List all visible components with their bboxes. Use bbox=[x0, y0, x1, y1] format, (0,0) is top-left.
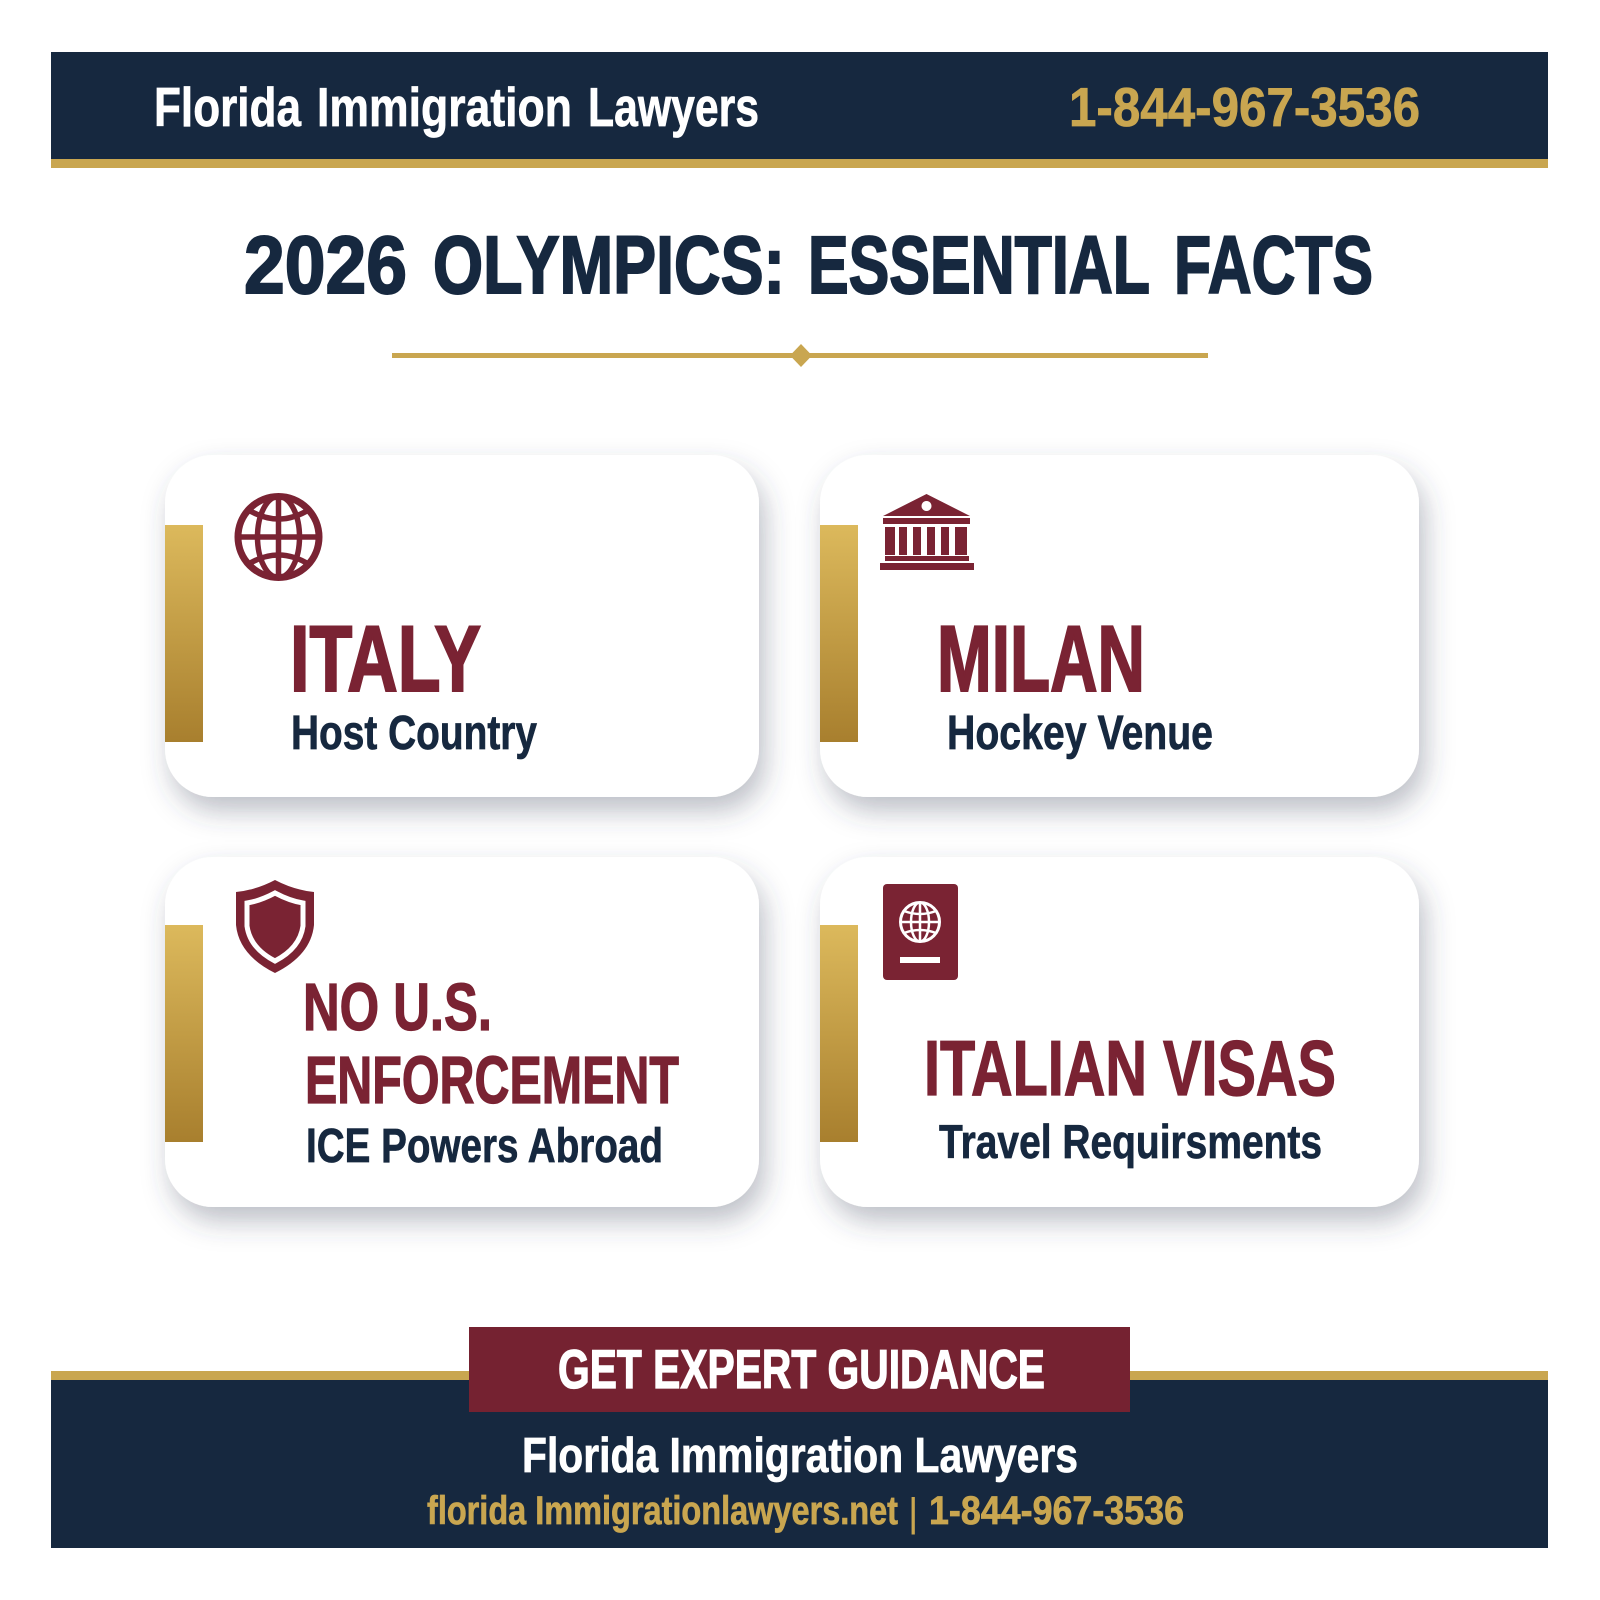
header firm name: Immigration bbox=[317, 76, 572, 138]
icon: shield bbox=[236, 880, 314, 973]
title: OLYMPICS: bbox=[433, 220, 785, 311]
label: hockey venue: Hockey Venue bbox=[947, 707, 1213, 760]
footer contact line: florida Immigrationlawyers.net bbox=[427, 1489, 898, 1533]
heading: No U.S.: NO U.S. bbox=[303, 970, 492, 1045]
heading: Italian visas: ITALIAN VISAS bbox=[924, 1024, 1336, 1112]
gold accent bar bbox=[165, 925, 203, 1142]
footer band bbox=[51, 1327, 1548, 1548]
icon: globe bbox=[238, 496, 319, 578]
call-to-action box: GET EXPERT GUIDANCE bbox=[558, 1338, 1045, 1400]
heading: Italy: ITALY bbox=[290, 606, 481, 711]
panel: No U.S. enforcement bbox=[165, 857, 759, 1207]
footer firm name: Florida Immigration Lawyers bbox=[522, 1429, 1078, 1483]
header firm name: Lawyers bbox=[588, 76, 759, 138]
gold accent bar bbox=[820, 525, 858, 742]
gold accent bar bbox=[820, 925, 858, 1142]
footer contact line: | bbox=[908, 1491, 918, 1535]
label: travel requirements: Travel Requirsments bbox=[939, 1115, 1322, 1168]
panel: Milan bbox=[820, 455, 1419, 797]
heading: Milan: MILAN bbox=[937, 606, 1145, 711]
label: host country: Host Country bbox=[291, 707, 537, 760]
panel: Italian visas bbox=[820, 857, 1419, 1207]
footer contact line: 1-844-967-3536 bbox=[929, 1489, 1184, 1533]
panel: Italy bbox=[165, 455, 759, 797]
title bbox=[244, 220, 1373, 311]
header band bbox=[51, 52, 1548, 168]
header firm name bbox=[154, 76, 759, 138]
title divider with diamond bbox=[392, 344, 1208, 367]
header phone: 1-844-967-3536 bbox=[1069, 76, 1420, 138]
gold accent bar bbox=[165, 525, 203, 742]
title: FACTS bbox=[1174, 220, 1373, 311]
label: ICE powers abroad: ICE Powers Abroad bbox=[306, 1120, 663, 1173]
title: 2026 bbox=[244, 220, 407, 311]
icon: classical building bbox=[880, 494, 974, 570]
heading: Enforcement: ENFORCEMENT bbox=[305, 1043, 679, 1118]
header firm name: Florida bbox=[154, 76, 301, 138]
icon: passport bbox=[883, 884, 958, 980]
title: ESSENTIAL bbox=[808, 220, 1150, 311]
call-to-action box bbox=[469, 1327, 1130, 1412]
